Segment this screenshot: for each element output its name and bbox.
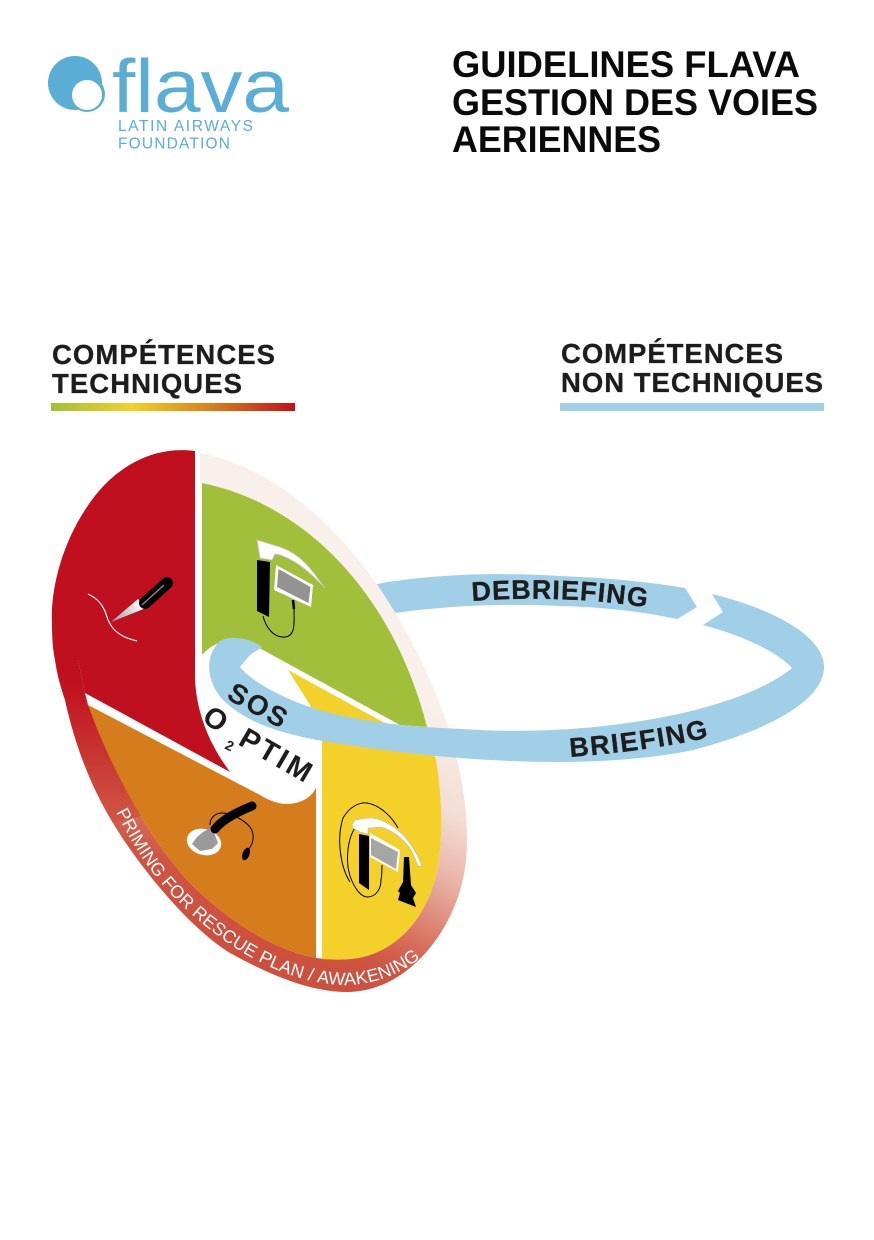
heading: compétences non techniques [560, 338, 824, 411]
label: O2PTIM [197, 700, 320, 791]
arrow: briefing [209, 594, 824, 762]
title [452, 44, 818, 160]
diagram: airway wheel [52, 450, 467, 992]
logo subtitle: FOUNDATION [118, 136, 230, 152]
sector: orange [88, 705, 316, 958]
label: SOS: SOS [223, 676, 295, 735]
heading: compétences techniques: TECHNIQUES [52, 368, 242, 399]
heading: compétences non techniques: COMPÉTENCES [561, 338, 783, 369]
sector: yellow [288, 670, 441, 960]
heading: compétences non techniques: NON TECHNIQUES [561, 367, 823, 398]
sector: green [202, 483, 427, 727]
title: AERIENNES [452, 119, 661, 160]
ring: priming for rescue plan [65, 453, 467, 992]
label: briefing: BRIEFING [570, 720, 706, 757]
ring left blend [55, 660, 145, 823]
label: debriefing: DEBRIEFING [472, 580, 647, 606]
sector: red [52, 450, 230, 772]
label: O2PTIM: 2 [223, 737, 237, 754]
icon: logo circles [48, 56, 105, 112]
ring label: priming for rescue plan / awakening: PRIMING FOR RESCUE PLAN / AWAKENING [116, 808, 418, 986]
icon: scalpel [88, 583, 167, 641]
logo subtitle: LATIN AIRWAYS [118, 118, 253, 135]
arrow: debriefing [377, 574, 697, 619]
icon: videolaryngoscope and fiberscope [340, 803, 422, 907]
label: O2PTIM: PTIM [234, 722, 320, 791]
logo wordmark: flava [112, 44, 289, 128]
logo subtitle [118, 118, 253, 152]
label: O2PTIM: O [197, 700, 234, 739]
title: GUIDELINES FLAVA [452, 44, 800, 85]
icon: videolaryngoscope [257, 540, 325, 637]
heading: compétences techniques [51, 339, 295, 411]
title: GESTION DES VOIES [452, 82, 818, 123]
ring interior [85, 450, 441, 959]
heading: compétences techniques: COMPÉTENCES [52, 339, 275, 370]
icon: laryngeal mask [184, 806, 253, 861]
logo: FLAVA Latin Airways Foundation [48, 44, 289, 152]
